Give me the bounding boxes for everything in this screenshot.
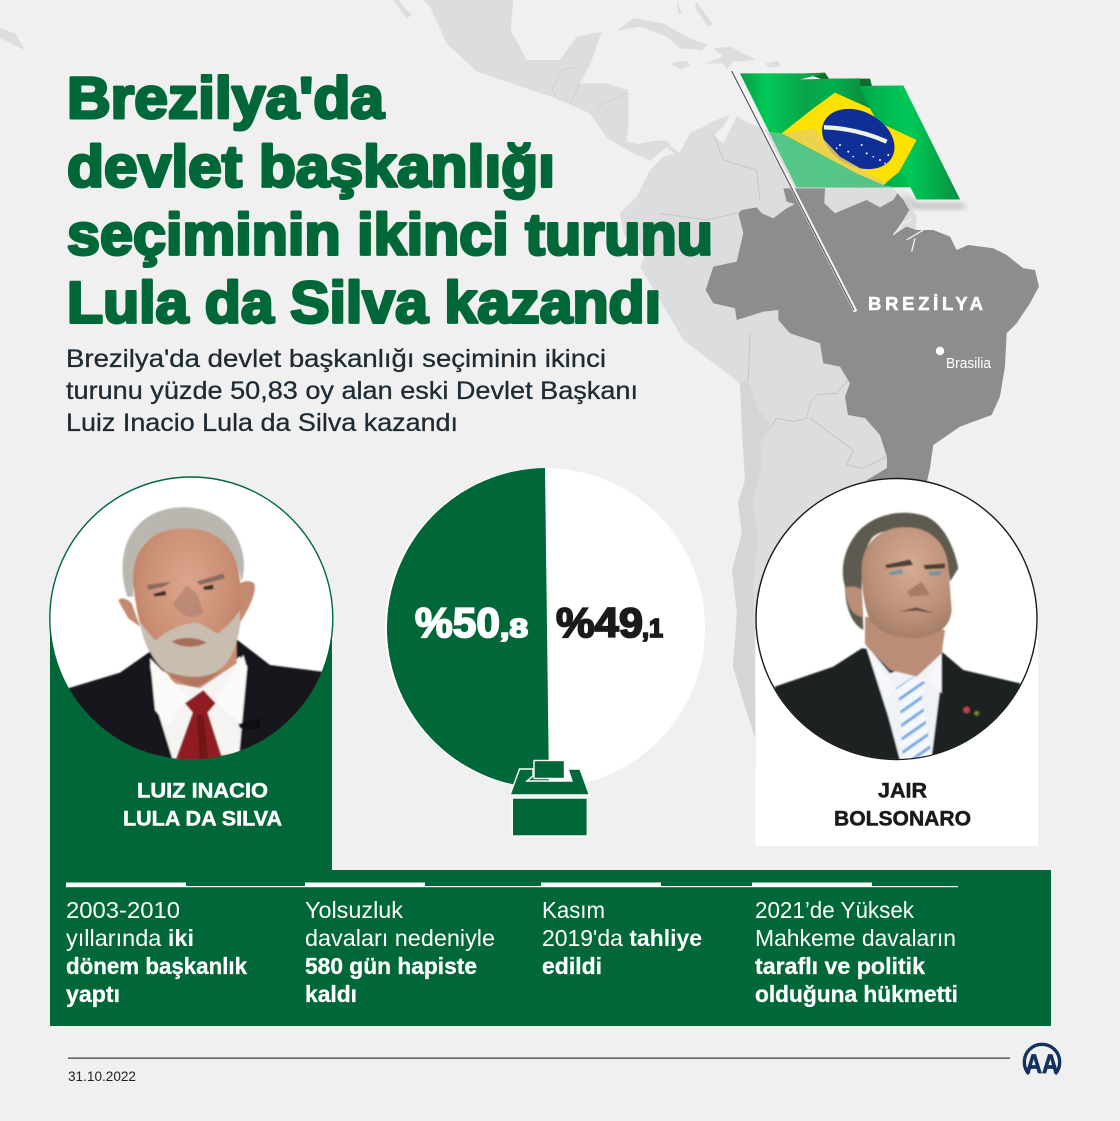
timeline item: 580 days in prison: Yolsuzluk	[305, 897, 404, 923]
map marker: Brasilia	[936, 347, 992, 372]
timeline item: November 2019 release: edildi	[542, 953, 602, 979]
portrait: Bolsonaro	[774, 512, 1021, 759]
timeline item: 2021 court ruling	[755, 897, 958, 1007]
timeline item: November 2019 release: Kasım	[542, 897, 605, 923]
portrait: Lula	[60, 507, 330, 770]
panel: Bolsonaro	[756, 478, 1038, 846]
name: Bolsonaro: JAIR	[878, 778, 927, 802]
name: Bolsonaro: BOLSONARO	[834, 806, 971, 830]
map marker: Brasilia: Brasilia	[946, 356, 992, 372]
icon: ballot box	[510, 760, 590, 836]
name: Lula: LULA DA SILVA	[123, 806, 282, 830]
bottom green band with Lula panel	[50, 615, 1051, 1026]
timeline item: 2021 court ruling: Mahkeme davaların	[755, 925, 956, 951]
footer rule	[68, 1058, 1010, 1059]
map: South America mainland	[620, 115, 917, 767]
pie chart: vote shares	[385, 468, 705, 788]
map: small island at top left	[0, 28, 25, 50]
timeline item: 2021 court ruling: olduğuna hükmetti	[755, 981, 958, 1007]
value: Lula share: ,8	[500, 613, 528, 643]
timeline item: 2003-2010: dönem başkanlık	[66, 953, 247, 979]
timeline item: November 2019 release: 2019'da tahliye	[542, 925, 702, 951]
title: Brezilya'da	[67, 66, 385, 131]
subtitle: Luiz Inacio Lula da Silva kazandı	[66, 409, 458, 437]
flag shadow	[900, 190, 967, 208]
timeline item: 580 days in prison: 580 gün hapiste	[305, 953, 477, 979]
timeline item: 2021 court ruling: taraflı ve politik	[755, 953, 925, 979]
subtitle: Brezilya'da devlet başkanlığı seçiminin ikinci	[66, 345, 606, 373]
name: Lula: LUIZ INACIO	[137, 778, 268, 802]
icon: AA logo: AA	[1026, 1049, 1058, 1079]
timeline item: 2003-2010	[66, 897, 247, 1007]
subtitle	[66, 345, 638, 437]
timeline item: 2021 court ruling: 2021’de Yüksek	[755, 897, 914, 923]
date: 31.10.2022	[68, 1068, 136, 1084]
timeline item: 2003-2010: yaptı	[66, 981, 120, 1007]
timeline rule	[66, 882, 958, 887]
name: Bolsonaro	[834, 778, 971, 830]
title: seçiminin ikinci turunu	[67, 202, 713, 268]
title: devlet başkanlığı	[67, 134, 555, 200]
value: Bolsonaro share: ,1	[642, 613, 663, 643]
timeline item: November 2019 release	[542, 897, 702, 979]
flag of Brazil on a pole	[732, 71, 967, 312]
value: Bolsonaro share: %49	[556, 599, 643, 646]
timeline item: 2003-2010: yıllarında iki	[66, 925, 194, 951]
flag pole	[732, 71, 856, 312]
title: Lula da Silva kazandı	[67, 270, 661, 336]
timeline item: 2003-2010: 2003-2010	[66, 897, 180, 923]
timeline item: 580 days in prison: kaldı	[305, 981, 357, 1007]
value: Lula share: %50	[415, 599, 500, 646]
flag cloth	[740, 73, 960, 199]
panel: Lula portrait	[50, 477, 333, 830]
subtitle: turunu yüzde 50,83 oy alan eski Devlet Başkanı	[66, 377, 638, 405]
title	[67, 66, 713, 336]
map: Central and South America	[0, 0, 917, 767]
map label: Brezilya: BREZİLYA	[868, 293, 983, 314]
map: Brazil	[706, 188, 1039, 490]
timeline item: 580 days in prison: davaları nedeniyle	[305, 925, 495, 951]
timeline item: 580 days in prison	[305, 897, 495, 1007]
name: Lula	[123, 778, 282, 830]
map: Mexico, Central America and Caribbean	[393, 0, 780, 161]
